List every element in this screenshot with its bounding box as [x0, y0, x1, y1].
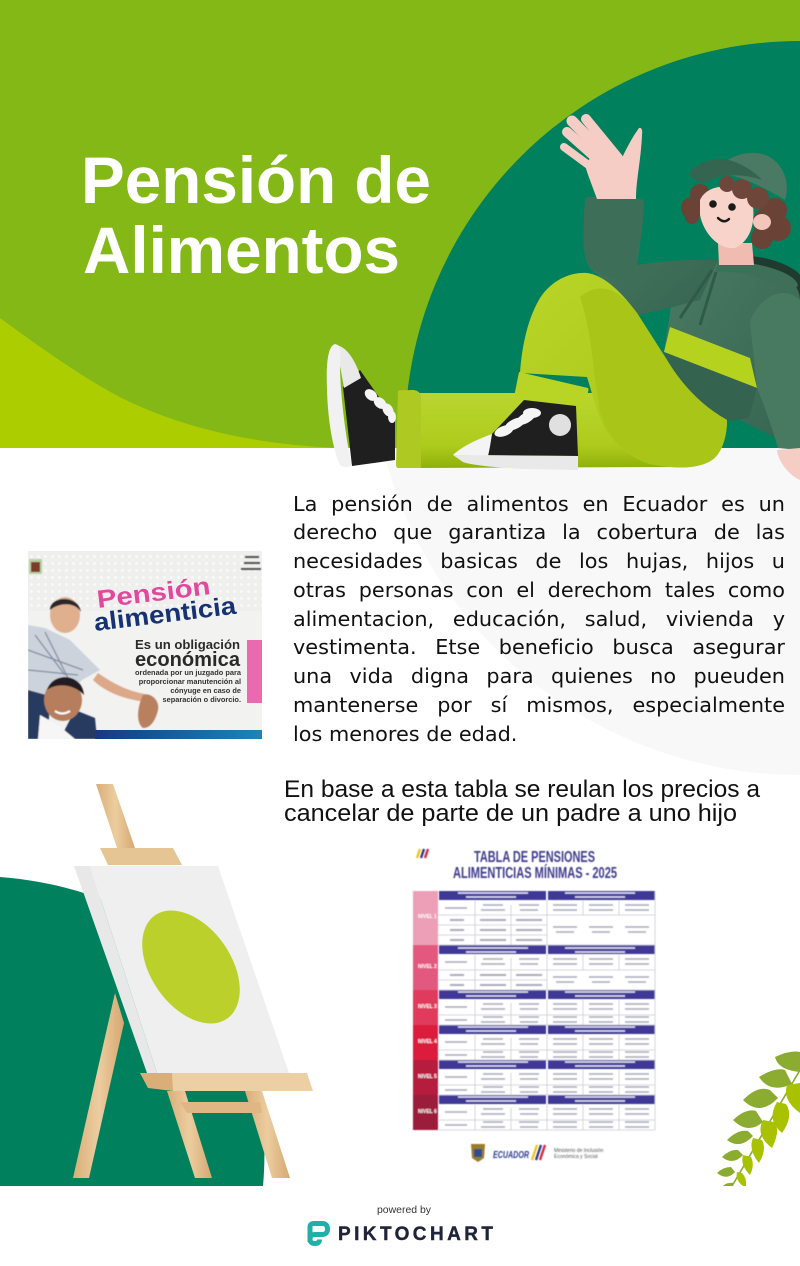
hair fringe — [719, 176, 769, 209]
table cells — [445, 893, 649, 1127]
table level labels: NIVEL 4 — [418, 1039, 437, 1045]
table level labels: NIVEL 3 — [418, 1004, 437, 1010]
photo text: proporcionar manutención al — [139, 677, 241, 686]
table level labels — [418, 914, 437, 1115]
body text: La pensión de alimentos en Ecuador es un — [293, 492, 785, 516]
photo text: cónyuge en caso de — [170, 686, 241, 695]
illustration: easel — [73, 784, 313, 1178]
canvas circle — [122, 892, 260, 1042]
footer: powered by Piktochart: PIKTOCHART — [338, 1224, 493, 1245]
lower hand — [777, 448, 800, 480]
title: Pensión de — [81, 143, 431, 217]
footer: powered by Piktochart — [310, 1205, 493, 1245]
photo text: alimenticia — [92, 592, 239, 637]
body text: los menores de edad. — [293, 722, 517, 746]
photo text: Pensión — [95, 572, 212, 614]
photo text: ordenada por un juzgado para — [135, 668, 242, 677]
table grid — [438, 891, 655, 1130]
photo text — [92, 572, 242, 704]
photo pink block — [247, 640, 262, 703]
torso — [664, 263, 800, 450]
header background — [0, 0, 800, 448]
cap — [690, 153, 787, 200]
body text: necesidades basicas de los hujas, hijos u — [293, 549, 785, 573]
drawstrings — [680, 270, 716, 325]
body text: otras personas con el derechom tales como — [293, 578, 785, 602]
raised arm — [584, 197, 718, 316]
table level labels: NIVEL 1 — [418, 914, 437, 920]
torso back hood — [750, 256, 800, 300]
illustration: seated character — [327, 119, 800, 480]
body text: derecho que garantiza la cobertura de las — [293, 520, 785, 544]
hair back — [681, 184, 791, 249]
photo people — [28, 597, 158, 739]
near arm — [750, 293, 800, 450]
footer logo icon — [310, 1224, 328, 1244]
body text: una vida digna para quienes no pueuden — [293, 664, 785, 688]
face — [700, 186, 753, 248]
table title: TABLA DE PENSIONES — [474, 849, 595, 866]
canvas — [74, 866, 157, 1073]
hood collar — [715, 262, 798, 298]
table footer logos: Económica y Social — [554, 1154, 598, 1160]
footer: powered by Piktochart: powered by — [377, 1205, 431, 1216]
table footer logos: Ministerio de Inclusión — [554, 1148, 604, 1154]
cuff — [515, 372, 588, 410]
body text: mantenerse por sí mismos, especialmente — [293, 693, 785, 717]
table level labels: NIVEL 2 — [418, 964, 437, 970]
title: Alimentos — [83, 213, 400, 287]
table level labels: NIVEL 6 — [418, 1109, 437, 1115]
text: tabla intro: cancelar de parte de un padre a uno hijo — [284, 800, 737, 827]
front shoe — [453, 400, 578, 470]
table title — [453, 849, 617, 882]
text: tabla intro — [284, 776, 761, 827]
tray — [140, 1073, 313, 1091]
photo text: económica — [135, 649, 241, 671]
leg crease — [580, 288, 727, 467]
pension table — [413, 849, 655, 1162]
title — [81, 143, 431, 287]
table title: ALIMENTICIAS MÍNIMAS - 2025 — [453, 865, 617, 882]
photo text: separación o divorcio. — [163, 695, 241, 704]
photo text: Es un obligación — [135, 637, 240, 652]
photo: pensión alimenticia — [28, 551, 262, 739]
table flag — [417, 849, 428, 858]
photo logos — [29, 557, 261, 574]
hem — [664, 352, 757, 421]
table footer logos — [471, 1144, 604, 1162]
far shoe — [327, 344, 396, 467]
lower-left green shape — [0, 877, 264, 1186]
table header bands — [439, 891, 655, 1104]
back leg — [415, 393, 680, 468]
body text — [293, 492, 785, 746]
text: tabla intro: En base a esta tabla se reulan los precios a — [284, 776, 761, 803]
table footer logos: ECUADOR — [493, 1150, 530, 1161]
hand raised — [564, 119, 642, 199]
bent leg — [520, 273, 727, 467]
leaves — [717, 1052, 800, 1186]
lime band — [664, 327, 757, 388]
table level labels: NIVEL 5 — [418, 1074, 437, 1080]
eyes and smile — [709, 200, 736, 221]
body text: alimentacion, educación, salud, vivienda y — [293, 607, 785, 631]
photo blue bar — [95, 730, 262, 739]
body text: vestimenta. Etse beneficio busca asegurar — [293, 635, 785, 659]
neck — [718, 243, 754, 265]
table level colours — [413, 891, 438, 1130]
